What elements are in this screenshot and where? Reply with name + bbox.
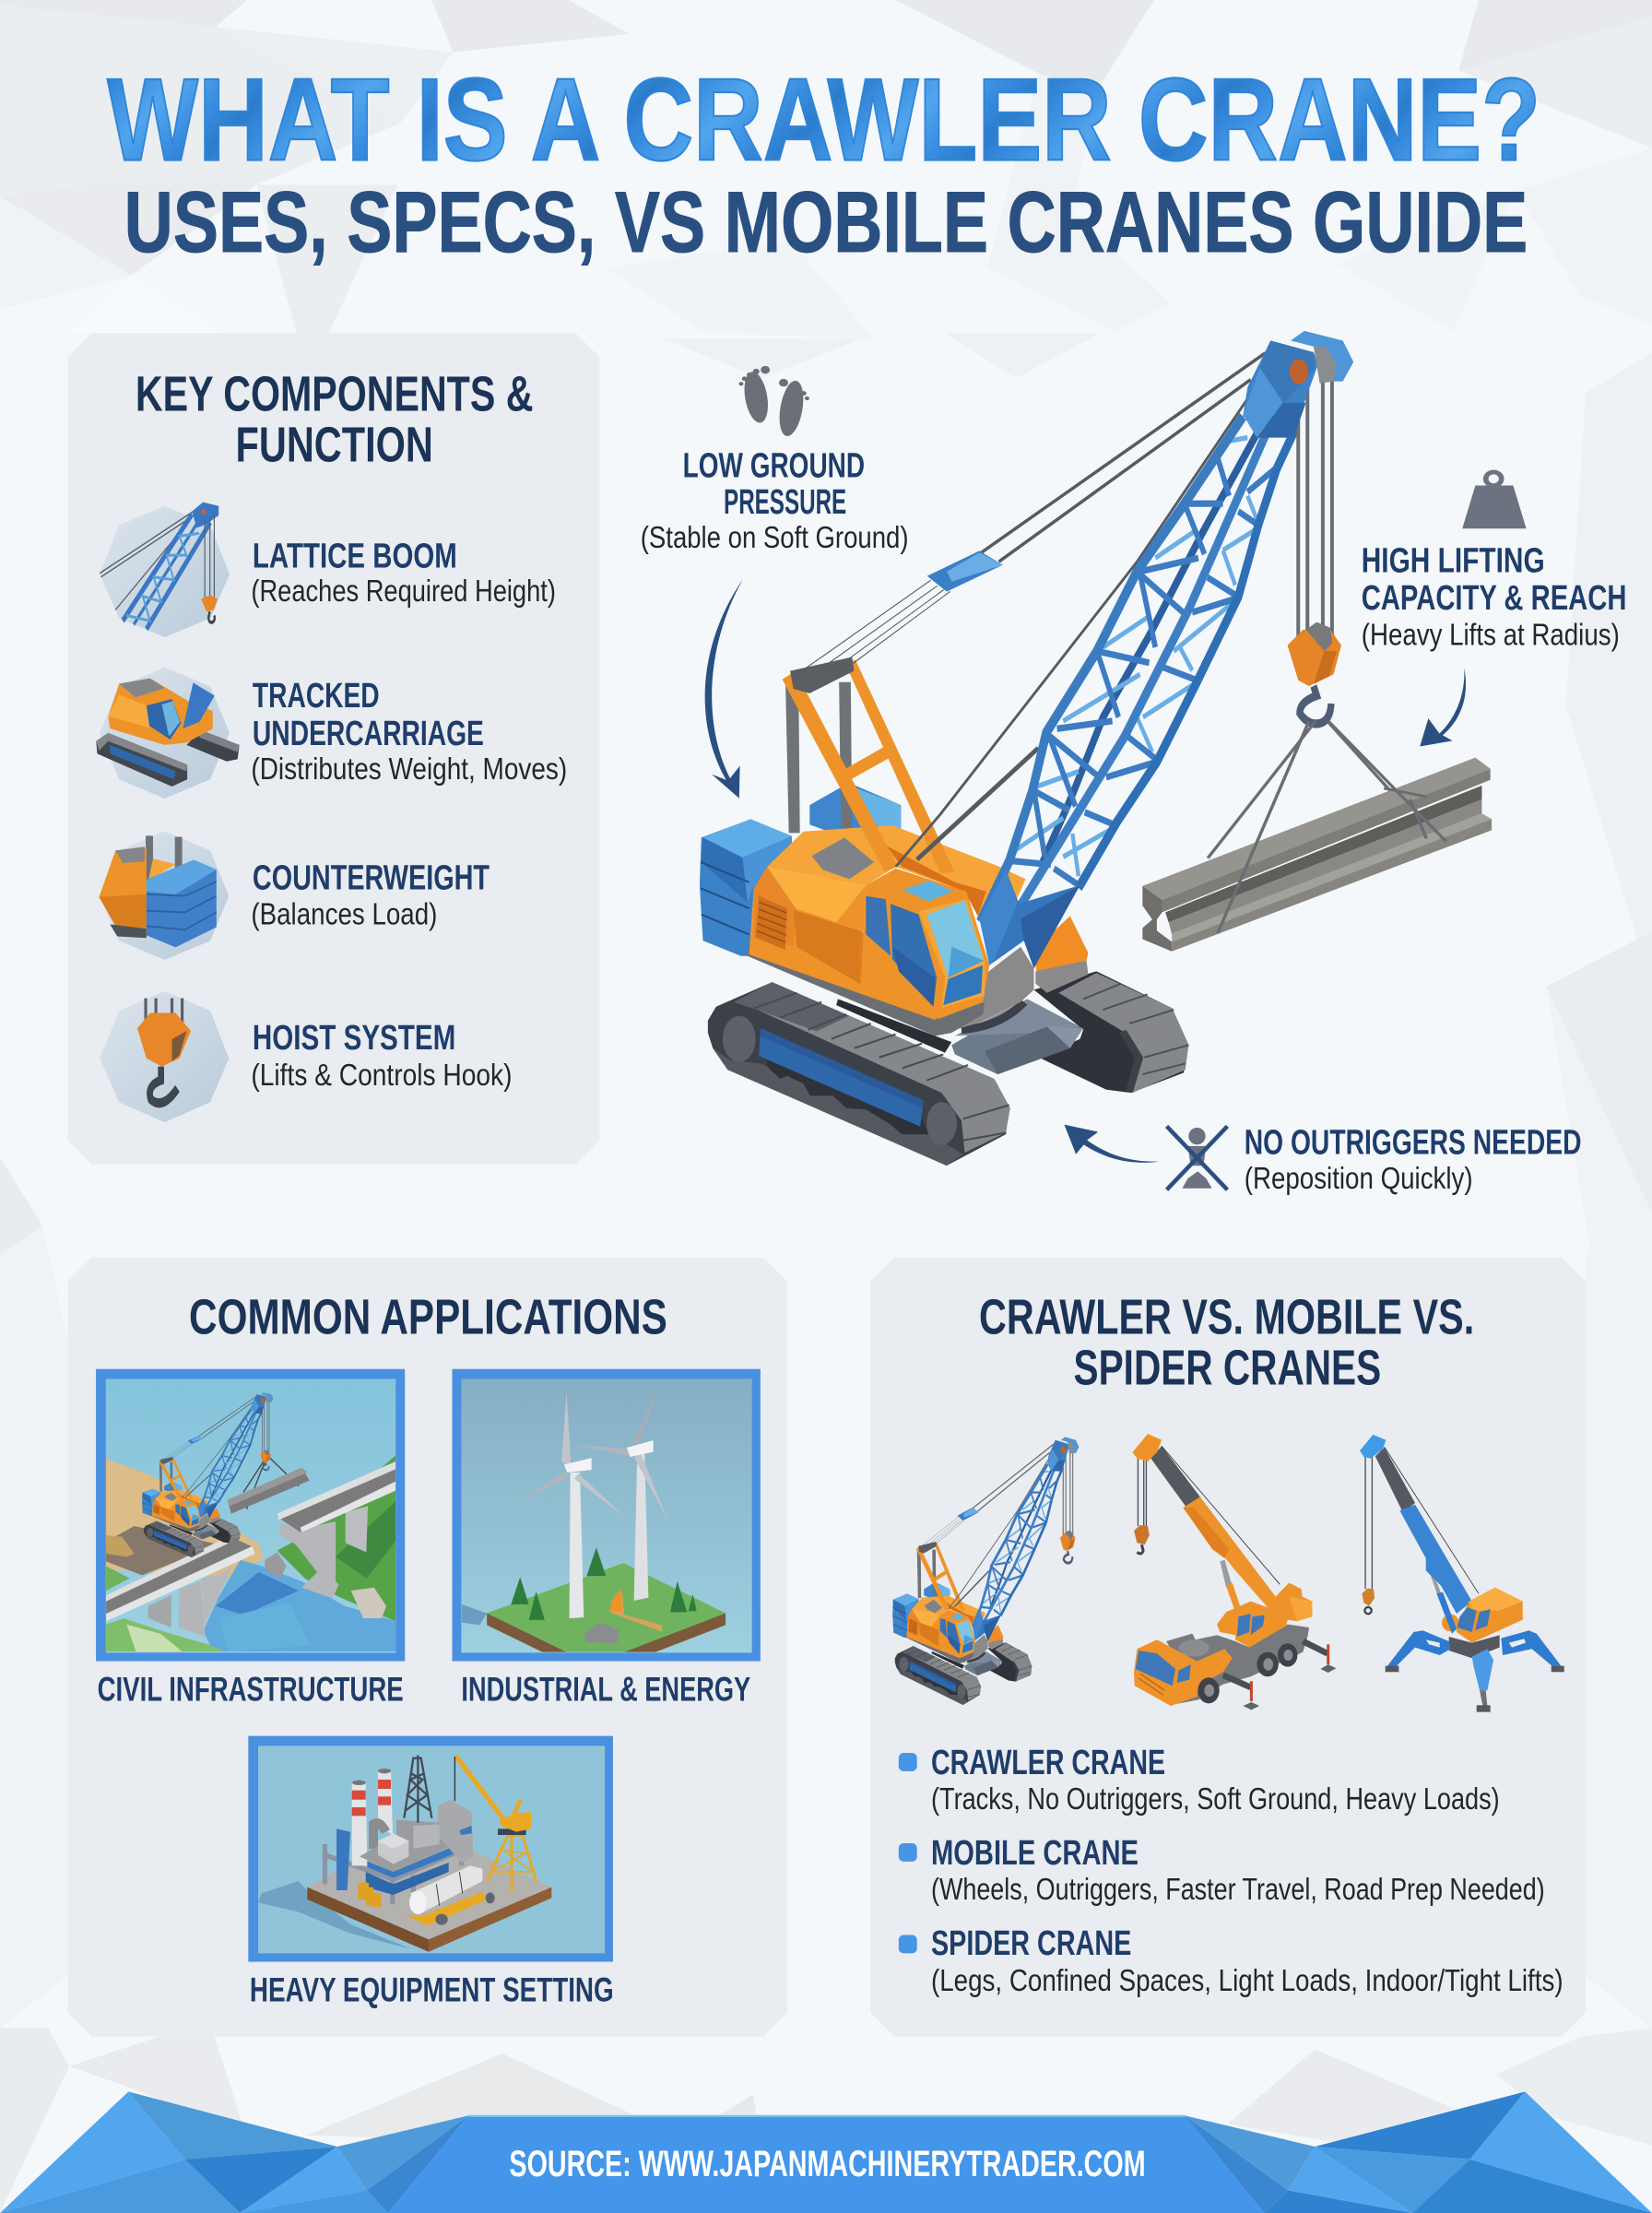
icon: small crawler crane	[892, 1437, 1079, 1705]
arrow: to counterweight	[705, 579, 743, 799]
image: civil infrastructure	[96, 1369, 405, 1662]
label: counterweight: (Balances Load)	[251, 897, 437, 931]
A-frame struts	[783, 657, 954, 873]
pendant cables	[802, 353, 1266, 867]
turntable and rear deck	[836, 916, 1088, 1053]
label: counterweight: COUNTERWEIGHT	[253, 858, 490, 897]
heading: crawler vs mobile: CRAWLER VS. MOBILE VS.	[979, 1290, 1474, 1344]
label: lattice boom: LATTICE BOOM	[253, 536, 457, 575]
image: heavy equipment setting	[248, 1736, 613, 1962]
hoist ropes	[1298, 380, 1332, 640]
caption: heavy equipment setting: HEAVY EQUIPMENT SETTING	[250, 1970, 614, 2008]
comparison item: spider crane	[899, 1923, 1564, 1997]
slings rear	[1208, 721, 1390, 858]
heading: spider cranes: SPIDER CRANES	[1074, 1342, 1381, 1396]
comparison item: mobile crane: MOBILE CRANE	[931, 1833, 1139, 1873]
icon: no outriggers	[1167, 1126, 1227, 1189]
icon: lattice boom	[100, 503, 230, 637]
icon: tracked undercarriage	[96, 668, 240, 799]
panel: key components	[67, 333, 599, 1165]
label: lattice boom: (Reaches Required Height)	[251, 574, 556, 608]
icon: spider crane	[1360, 1435, 1564, 1712]
heading: function: FUNCTION	[236, 419, 433, 473]
hook block	[1288, 622, 1341, 724]
caption: industrial and energy: INDUSTRIAL & ENERGY	[461, 1670, 750, 1708]
comparison item: crawler crane	[899, 1743, 1500, 1816]
label: tracked undercarriage: UNDERCARRIAGE	[253, 714, 484, 753]
panel: crane comparison	[870, 1258, 1586, 2037]
callout: no outriggers: (Reposition Quickly)	[1245, 1161, 1473, 1195]
front track	[708, 982, 1010, 1166]
undercarriage	[951, 999, 1083, 1074]
label: hoist system: (Lifts & Controls Hook)	[251, 1058, 513, 1092]
callout: low ground pressure	[641, 366, 909, 554]
label: tracked undercarriage	[251, 676, 567, 786]
panel: common applications	[67, 1258, 787, 2037]
rear counterweight	[809, 783, 901, 841]
label: lattice boom	[251, 536, 556, 608]
icon: hoist system	[100, 991, 229, 1122]
callout: low ground pressure: LOW GROUND	[683, 445, 865, 485]
cab	[861, 869, 989, 1019]
steel beam load	[1142, 721, 1492, 952]
icon: weight	[1462, 472, 1527, 528]
main crawler crane	[700, 331, 1353, 1166]
icon: mobile crane	[1132, 1434, 1336, 1710]
callout: no outriggers	[1167, 1122, 1581, 1195]
equalizer block	[927, 550, 1003, 592]
label: tracked undercarriage: TRACKED	[253, 676, 380, 716]
label: tracked undercarriage: (Distributes Weight, Moves)	[251, 751, 567, 786]
slings front	[1218, 721, 1446, 933]
gantry posts	[785, 682, 852, 833]
upper body	[748, 825, 1026, 1035]
label: counterweight	[251, 858, 490, 931]
comparison item: crawler crane: CRAWLER CRANE	[931, 1743, 1165, 1782]
heading: common applications: COMMON APPLICATIONS	[189, 1290, 667, 1344]
rear track	[1033, 971, 1188, 1093]
footer source text: SOURCE: WWW.JAPANMACHINERYTRADER.COM	[509, 2144, 1146, 2184]
icon: counterweight	[99, 832, 229, 960]
heading: key components: KEY COMPONENTS &	[136, 367, 533, 421]
icon: footprints	[738, 366, 809, 437]
comparison item: crawler crane: (Tracks, No Outriggers, Soft Ground, Heavy Loads)	[931, 1781, 1500, 1816]
arrow: to tracks	[1064, 1125, 1159, 1163]
caption: civil infrastructure: CIVIL INFRASTRUCTURE	[98, 1670, 404, 1708]
lattice boom	[980, 416, 1297, 922]
boom base	[980, 870, 1080, 968]
label: hoist system: HOIST SYSTEM	[253, 1018, 455, 1058]
comparison item: spider crane: SPIDER CRANE	[931, 1923, 1131, 1963]
footer band	[0, 2091, 1652, 2213]
callout: low ground pressure: (Stable on Soft Ground)	[641, 520, 909, 554]
mini crane	[142, 1392, 274, 1557]
arrow: to beam	[1420, 669, 1466, 746]
label: hoist system	[251, 1018, 513, 1092]
comparison item: mobile crane	[899, 1833, 1545, 1906]
boom head	[1243, 331, 1353, 438]
callout: high lifting capacity: HIGH LIFTING	[1362, 541, 1545, 581]
image: industrial and energy	[452, 1369, 761, 1662]
counterweight stack	[700, 819, 792, 956]
callout: low ground pressure: PRESSURE	[724, 482, 846, 522]
callout: high lifting capacity	[1362, 472, 1626, 651]
